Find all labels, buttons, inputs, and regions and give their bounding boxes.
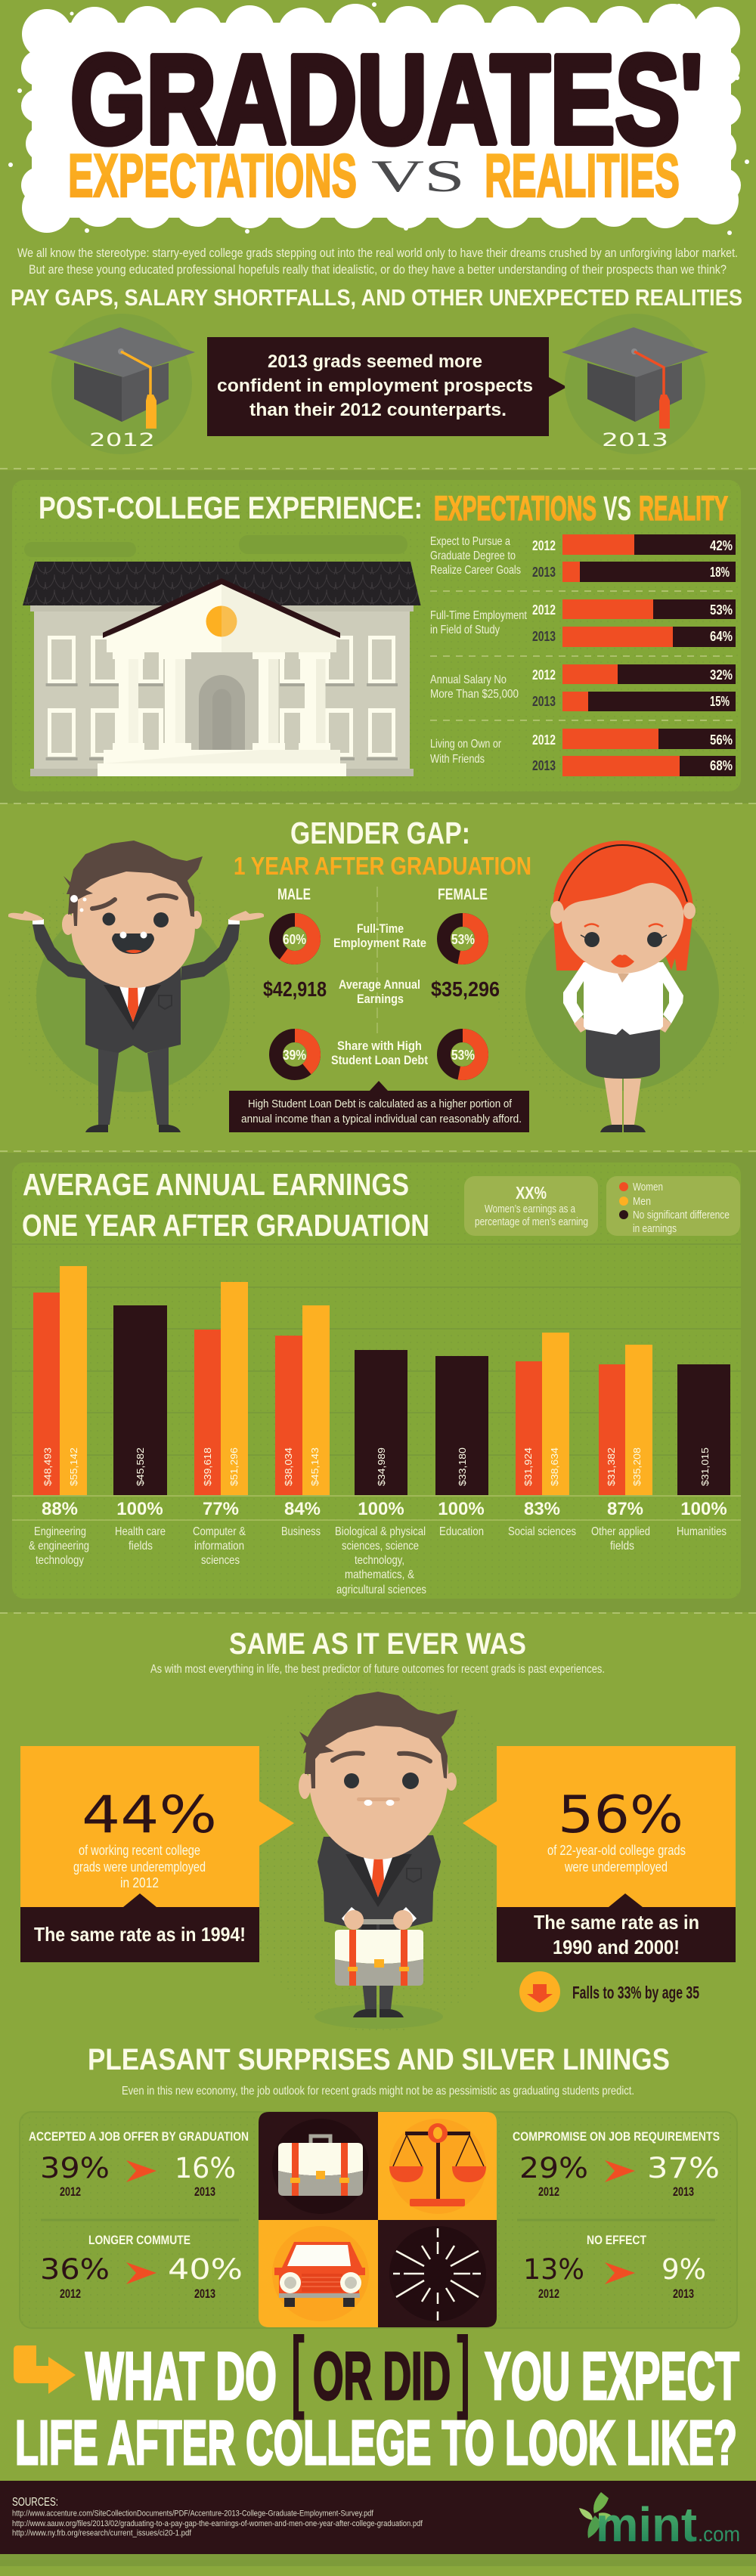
label: employment rate: [333, 921, 426, 950]
bar group: full-time employment: 2012: [532, 602, 556, 618]
heading: earnings: ONE YEAR AFTER GRADUATION: [22, 1208, 429, 1243]
field labels: Education: [439, 1525, 484, 1538]
bar group: full-time employment: [430, 599, 736, 647]
stat: compromise on job requirements: 2013: [673, 2184, 694, 2199]
bar chart: earnings by field: $39,618: [202, 1447, 213, 1486]
heading: gender gap: 1 YEAR AFTER GRADUATION: [234, 852, 531, 880]
stat panel: 56% underemployed: 56%: [558, 1785, 683, 1845]
label: loan debt: Share with High: [337, 1039, 422, 1053]
call to action: [: [291, 2317, 305, 2420]
stat panel: 56% underemployed: 1990 and 2000!: [553, 1936, 680, 1958]
heading: pleasant surprises: [88, 2043, 670, 2098]
logo: mint.com: .com: [698, 2522, 740, 2546]
callout: confidence: than their 2012 counterparts.: [249, 400, 507, 420]
bar group: living on own: 68%: [710, 758, 733, 773]
field labels: Computer &: [193, 1525, 246, 1538]
stat: accepted a job offer: 16%: [175, 2152, 236, 2184]
heading: same as it ever was: [150, 1627, 605, 1676]
icon: graduation cap 2013: [562, 314, 708, 454]
heading: post-college: VS: [603, 489, 631, 528]
stat: accepted a job offer: 2013: [194, 2184, 215, 2199]
bar group: annual salary: 32%: [710, 667, 733, 683]
subtitle: Expectations vs Realities: EXPECTATIONS: [68, 142, 357, 210]
bar chart: earnings by field: $55,142: [68, 1447, 79, 1486]
bar chart: earnings by field: $38,634: [549, 1447, 560, 1486]
bar group: full-time employment: 2013: [532, 629, 556, 644]
percentages row: [42, 1499, 727, 1519]
bar group: annual salary: Annual Salary No: [430, 673, 507, 686]
stat panel: 56% underemployed: were underemployed: [564, 1859, 668, 1875]
heading: pleasant surprises: PLEASANT SURPRISES AND SILVER LININGS: [88, 2043, 670, 2076]
field labels: Engineering: [34, 1525, 86, 1538]
bar group: graduate degree: 18%: [710, 565, 730, 580]
call to action: WHAT DO: [85, 2338, 277, 2413]
stat: longer commute: 2013: [194, 2287, 215, 2301]
column labels: male and female: FEMALE: [438, 886, 488, 903]
heading: gender gap: GENDER GAP:: [290, 816, 470, 850]
sources: [12, 2496, 423, 2538]
legend: percentage key: [464, 1176, 598, 1236]
label: loan debt: Student Loan Debt: [331, 1053, 428, 1067]
stat: compromise on job requirements: 37%: [647, 2152, 720, 2184]
field labels: technology,: [355, 1554, 404, 1567]
field labels: information: [194, 1540, 244, 1553]
band: earnings section: [0, 1151, 756, 1613]
bar group: graduate degree: Realize Career Goals: [430, 564, 521, 577]
bar group: living on own: 56%: [710, 732, 733, 748]
stat panel: 44% underemployed: of working recent college: [79, 1843, 200, 1858]
column labels: male and female: [277, 886, 488, 1038]
percentages row: 100%: [116, 1499, 163, 1519]
stat panel: 56% underemployed: of 22-year-old college grads: [547, 1843, 686, 1858]
bar chart: earnings by field: $45,582: [135, 1447, 146, 1486]
callout: high student loan debt: [229, 1081, 529, 1132]
bar group: annual salary: 2012: [532, 667, 556, 683]
intro text: [17, 246, 738, 277]
field labels: technology: [36, 1554, 84, 1567]
icon: sunburst: [389, 2226, 486, 2321]
stat panel: 44% underemployed: The same rate as in 1994!: [34, 1923, 246, 1946]
bar chart: earnings by field: $34,989: [376, 1447, 387, 1486]
heading: post-college: [39, 489, 728, 528]
field labels: Humanities: [677, 1525, 727, 1538]
bar group: annual salary: [430, 664, 736, 711]
bar chart: earnings by field: [33, 1266, 730, 1495]
stat: accepted a job offer: 2012: [60, 2184, 81, 2199]
percentages row: 84%: [284, 1499, 321, 1519]
donut: female debt 53%: [444, 1036, 482, 1073]
label: employment rate: Employment Rate: [333, 936, 426, 950]
sources: http://www.aauw.org/files/2013/02/graduating-to-a-pay-gap-the-earnings-of-women-and-men-one-year-after-college-graduation.pdf: [12, 2519, 423, 2528]
stat: no effect: 2012: [538, 2287, 559, 2301]
percentages row: 100%: [438, 1499, 485, 1519]
stat panel: 56% underemployed: [463, 1746, 736, 1962]
call to action: [15, 2317, 739, 2478]
illustration: college building: [23, 562, 420, 776]
percentages row: 100%: [680, 1499, 727, 1519]
illustration: worried male graduate: [8, 841, 264, 1132]
callout: falls to 33%: [519, 1971, 699, 2012]
stat: no effect: 13%: [523, 2253, 584, 2286]
field labels: fields: [129, 1540, 153, 1553]
panel: silver linings: [20, 2112, 737, 2328]
bar group: full-time employment: Full-Time Employment: [430, 609, 527, 622]
legend: percentage key: XX%: [516, 1183, 547, 1203]
bar chart: earnings by field: $48,493: [42, 1447, 53, 1486]
logo: mint.com: mint: [596, 2497, 697, 2552]
percentages row: 83%: [524, 1499, 560, 1519]
field labels: Biological & physical: [335, 1525, 426, 1538]
field labels: sciences: [201, 1554, 240, 1567]
heading: same as it ever was: As with most everything in life, the best predictor of future outcomes for recent grads is past experiences.: [150, 1663, 605, 1676]
bar group: full-time employment: in Field of Study: [430, 624, 500, 636]
field labels: Other applied: [591, 1525, 650, 1538]
field labels: [29, 1525, 727, 1596]
sources: SOURCES:: [12, 2496, 58, 2509]
icon: briefcase: [272, 2119, 369, 2214]
stat: accepted a job offer: [29, 2129, 249, 2199]
percentages row: 87%: [607, 1499, 643, 1519]
percentages row: 88%: [42, 1499, 78, 1519]
icon: graduation cap 2012: [48, 314, 195, 454]
heading: gender gap: [234, 816, 531, 880]
bar group: graduate degree: [430, 534, 736, 582]
bar group: living on own: [430, 729, 736, 776]
bar chart: earnings by field: $31,924: [522, 1447, 534, 1486]
stat panel: 44% underemployed: in 2012: [120, 1875, 159, 1890]
bar group: full-time employment: 64%: [710, 629, 733, 644]
stat panel: 44% underemployed: grads were underemployed: [73, 1859, 206, 1875]
earnings comparison: $42,918: [263, 977, 327, 1001]
percentages row: 100%: [358, 1499, 404, 1519]
legend: colour key: Women: [633, 1181, 663, 1194]
donut: male debt 39%: [276, 1036, 314, 1073]
legend: colour key: in earnings: [633, 1222, 677, 1235]
stat: compromise on job requirements: COMPROMISE ON JOB REQUIREMENTS: [513, 2129, 720, 2144]
heading: pleasant surprises: Even in this new economy, the job outlook for recent grads might not be as pessimistic as graduating students predict.: [122, 2085, 634, 2098]
legend: colour key: [606, 1176, 740, 1236]
bar group: living on own: 2012: [532, 732, 556, 748]
icon: graduation cap 2013: 2013: [602, 429, 668, 450]
sources: http://www.ny.frb.org/research/current_issues/ci20-1.pdf: [12, 2529, 192, 2538]
bar chart: earnings by field: $38,034: [283, 1447, 294, 1486]
field labels: Health care: [115, 1525, 166, 1538]
earnings comparison: $35,296: [431, 977, 500, 1001]
label: employment rate: Full-Time: [357, 921, 404, 936]
stat: compromise on job requirements: 2012: [538, 2184, 559, 2199]
logo: mint.com: [579, 2492, 740, 2552]
footer: [0, 2481, 756, 2566]
field labels: & engineering: [29, 1540, 89, 1553]
title cloud: [8, 2, 749, 235]
icon: scales: [389, 2119, 486, 2214]
field labels: agricultural sciences: [336, 1584, 426, 1596]
bar group: graduate degree: 2013: [532, 565, 556, 580]
bar group: annual salary: 2013: [532, 694, 556, 709]
columns: [113, 652, 330, 751]
stat panel: 44% underemployed: [20, 1746, 294, 1962]
stat: accepted a job offer: ACCEPTED A JOB OFFER BY GRADUATION: [29, 2129, 249, 2144]
illustration: female graduate: [497, 841, 747, 1132]
stat: no effect: [523, 2233, 706, 2301]
stat: compromise on job requirements: [513, 2129, 720, 2199]
stat panel: 44% underemployed: 44%: [82, 1785, 217, 1845]
legend: percentage key: percentage of men’s earning: [475, 1215, 588, 1228]
heading: earnings: AVERAGE ANNUAL EARNINGS: [23, 1167, 409, 1202]
donut: female debt 53%: 53%: [451, 1048, 475, 1063]
stat panel: 56% underemployed: The same rate as in: [534, 1911, 699, 1934]
stat: longer commute: 36%: [40, 2253, 110, 2286]
bar group: graduate degree: Graduate Degree to: [430, 550, 516, 562]
label: loan debt: [331, 1039, 428, 1067]
panel: post-college experience: [12, 480, 741, 791]
bar chart: earnings by field: $51,296: [228, 1447, 240, 1486]
heading: same as it ever was: SAME AS IT EVER WAS: [229, 1627, 526, 1661]
donut: male employment 60%: 60%: [283, 932, 306, 947]
sources: http://www.accenture.com/SiteCollectionDocuments/PDF/Accenture-2013-College-Graduate-Employment-Survey.pdf: [12, 2509, 374, 2519]
field labels: sciences, science: [342, 1540, 419, 1553]
field labels: mathematics, &: [345, 1568, 414, 1581]
bar group: graduate degree: Expect to Pursue a: [430, 535, 510, 548]
field labels: Business: [281, 1525, 321, 1538]
legend: colour key: Men: [633, 1195, 651, 1208]
callout: confidence: confident in employment prospects: [217, 376, 533, 396]
band: post-college section: [0, 469, 756, 803]
field labels: Social sciences: [508, 1525, 576, 1538]
stat: longer commute: LONGER COMMUTE: [88, 2233, 191, 2247]
heading: post-college: EXPECTATIONS: [434, 489, 596, 528]
callout: high student loan debt: High Student Loan Debt is calculated as a higher portion of: [248, 1098, 513, 1110]
legend: percentage key: Women’s earnings as a: [485, 1203, 576, 1215]
donut: female employment 53%: [444, 920, 482, 958]
earnings comparison: Average Annual: [339, 977, 420, 992]
stat: longer commute: 2012: [60, 2287, 81, 2301]
bar chart: earnings by field: $35,208: [631, 1447, 643, 1486]
icon grid: four tiles: [259, 2112, 497, 2327]
call to action: OR DID: [313, 2338, 451, 2413]
stat: no effect: 2013: [673, 2287, 694, 2301]
bar group: graduate degree: 42%: [710, 538, 733, 553]
callout: confidence: [207, 337, 567, 436]
donut: male employment 60%: [276, 920, 314, 958]
earnings comparison: [263, 977, 500, 1006]
icon: graduation cap 2012: 2012: [89, 429, 155, 450]
field labels: fields: [610, 1540, 634, 1553]
bar group: annual salary: More Than $25,000: [430, 688, 519, 701]
bar chart: earnings by field: $45,143: [309, 1447, 321, 1486]
stat: no effect: 9%: [662, 2253, 706, 2286]
legend: colour key: No significant difference: [633, 1209, 730, 1221]
subtitle: Expectations vs Realities: VS: [371, 151, 465, 201]
icon: car: [272, 2226, 369, 2321]
stat: compromise on job requirements: 29%: [519, 2152, 588, 2184]
donut: male debt 39%: 39%: [283, 1048, 306, 1063]
heading: post-college: POST-COLLEGE EXPERIENCE:: [39, 490, 423, 525]
illustration: graduate with briefcase: [235, 1670, 522, 2033]
bar group: annual salary: 15%: [710, 694, 730, 709]
stat: accepted a job offer: 39%: [40, 2152, 110, 2184]
bar group: living on own: With Friends: [430, 753, 485, 766]
arrow: yellow pointer: [14, 2345, 76, 2394]
bar chart: earnings by field: $31,015: [699, 1447, 711, 1486]
panel: average annual earnings: [12, 1163, 741, 1599]
column labels: male and female: MALE: [277, 886, 311, 903]
bar group: full-time employment: 53%: [710, 602, 733, 618]
earnings comparison: Earnings: [357, 992, 404, 1006]
bar group: living on own: 2013: [532, 758, 556, 773]
bar chart: earnings by field: $31,382: [606, 1447, 617, 1486]
call to action: ]: [457, 2317, 470, 2420]
callout: falls to 33%: Falls to 33% by age 35: [572, 1983, 699, 2002]
callout: confidence: 2013 grads seemed more: [268, 351, 482, 372]
bar group: graduate degree: 2012: [532, 538, 556, 553]
stat: longer commute: 40%: [168, 2253, 243, 2286]
percentages row: 77%: [203, 1499, 239, 1519]
stat: no effect: NO EFFECT: [587, 2233, 646, 2247]
stat: longer commute: [40, 2233, 243, 2301]
heading: earnings: [22, 1167, 429, 1243]
donut: female employment 53%: 53%: [451, 932, 475, 947]
bar chart: earnings by field: $33,180: [457, 1447, 468, 1486]
bar group: living on own: Living on Own or: [430, 738, 502, 751]
callout: high student loan debt: annual income than a typical individual can reasonably afford.: [241, 1113, 522, 1125]
